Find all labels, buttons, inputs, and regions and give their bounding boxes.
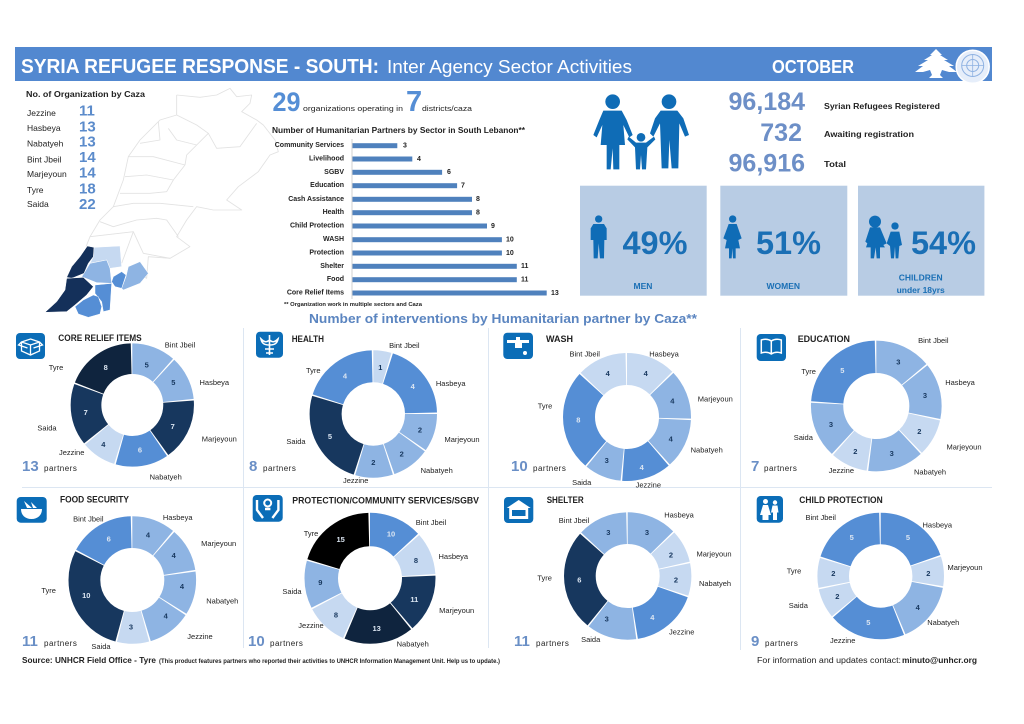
list rows: 13 xyxy=(79,118,96,136)
icon: box xyxy=(16,333,45,359)
partners count: 7 xyxy=(751,458,759,475)
slice labels: 2 xyxy=(926,569,930,578)
slice labels: Bint Jbeil xyxy=(389,341,420,350)
panel: women xyxy=(720,186,847,296)
partners count: partners xyxy=(765,639,798,648)
donut chart xyxy=(827,357,926,455)
slice labels: 5 xyxy=(171,378,175,387)
slice labels: Nabatyeh xyxy=(699,579,731,588)
list rows: 14 xyxy=(79,149,96,166)
refugee totals: 732 xyxy=(760,119,802,147)
slice labels: 8 xyxy=(334,610,338,620)
map of Lebanon with south highlighted xyxy=(45,88,278,317)
partners count: partners xyxy=(533,464,566,473)
icon: caduceus xyxy=(256,332,283,358)
refugee totals: Syrian Refugees Registered xyxy=(824,102,940,111)
partners count: 13 xyxy=(22,458,39,475)
partners count xyxy=(511,458,566,475)
slice labels: Marjeyoun xyxy=(202,434,237,444)
partners count: 10 xyxy=(511,458,528,475)
slice labels xyxy=(286,341,480,485)
slice labels: 5 xyxy=(145,360,149,370)
slice labels: 4 xyxy=(644,369,649,378)
bar values xyxy=(403,142,559,297)
bar category labels xyxy=(275,142,344,296)
panel: core relief items xyxy=(16,333,237,482)
list rows: Tyre xyxy=(27,185,44,195)
slice labels: 2 xyxy=(835,592,839,601)
list rows: 11 xyxy=(79,102,95,120)
icon: UN emblem xyxy=(956,50,989,83)
slice labels: Marjeyoun xyxy=(946,442,982,452)
slice labels xyxy=(538,350,733,490)
slice labels: Jezzine xyxy=(187,632,213,641)
footnote: ** Organization work in multiple sectors and Caza xyxy=(284,302,423,308)
slice labels: Saida xyxy=(581,635,601,644)
slice labels: 2 xyxy=(853,447,857,456)
panel: organizations by caza list xyxy=(26,89,145,213)
slice labels: Jezzine xyxy=(636,480,661,490)
slice labels: Nabatyeh xyxy=(914,468,946,476)
bar values: 9 xyxy=(491,223,495,230)
slice labels: 4 xyxy=(650,613,655,622)
bar values: 3 xyxy=(403,142,407,150)
slice labels: Nabatyeh xyxy=(691,446,723,454)
slice labels: Tyre xyxy=(304,529,318,538)
footer source: (This product features partners who reported their activities to UNHCR Information Management Unit. Help us to update.) xyxy=(159,659,500,665)
slice labels: 10 xyxy=(82,591,90,600)
bar category labels: Shelter xyxy=(320,263,344,270)
slice labels: Jezzine xyxy=(343,476,368,485)
partners count: partners xyxy=(263,464,296,473)
slice labels: 6 xyxy=(107,534,111,544)
icon: tap xyxy=(503,333,533,359)
list rows: 14 xyxy=(79,164,96,182)
section heading: Number of interventions by Humanitarian partner by Caza** xyxy=(309,311,698,326)
slice labels: Tyre xyxy=(306,366,321,375)
heading: CHILD PROTECTION xyxy=(799,495,883,505)
bar category labels: SGBV xyxy=(324,169,344,176)
panel: men xyxy=(580,186,707,296)
slice labels: 9 xyxy=(318,578,322,587)
slice labels: 3 xyxy=(605,614,609,624)
slice labels: Marjeyoun xyxy=(201,539,236,548)
icon: family xyxy=(593,94,689,169)
bar values: 4 xyxy=(417,156,421,163)
slice labels: 3 xyxy=(923,391,927,400)
slice labels: Jezzine xyxy=(829,466,854,475)
donut chart xyxy=(84,532,180,628)
caption detail: under 18yrs xyxy=(897,285,945,295)
list rows: Marjeyoun xyxy=(27,169,67,179)
bar values: 8 xyxy=(476,196,480,203)
slice labels: Hasbeya xyxy=(199,378,230,387)
slice labels: Hasbeya xyxy=(436,379,466,388)
icon: man xyxy=(591,215,607,258)
bar category labels: Community Services xyxy=(275,142,344,149)
slice labels: 15 xyxy=(337,535,345,544)
slice labels: 4 xyxy=(916,603,921,612)
slice labels: 7 xyxy=(171,422,175,431)
panel: shelter xyxy=(504,495,732,650)
slice labels: Jezzine xyxy=(830,636,855,645)
slice labels: Tyre xyxy=(537,574,552,582)
slice labels: Marjeyoun xyxy=(698,394,733,404)
slice labels: 4 xyxy=(343,372,348,380)
slice labels: 2 xyxy=(669,550,673,560)
bar values: 10 xyxy=(506,250,514,257)
slice labels: Bint Jbeil xyxy=(918,336,949,345)
heading: SHELTER xyxy=(547,495,584,505)
title: SYRIA REFUGEE RESPONSE - SOUTH: xyxy=(21,56,379,78)
slice labels: 2 xyxy=(418,426,422,434)
list rows: Saida xyxy=(27,199,49,209)
donut chart xyxy=(321,530,419,627)
partners count xyxy=(22,458,77,475)
slice labels: 4 xyxy=(669,434,674,444)
headline: organizations and districts: 7 xyxy=(406,86,422,118)
panel: child protection xyxy=(751,495,983,650)
slice labels: 3 xyxy=(605,456,609,465)
slice labels: Saida xyxy=(794,433,814,442)
heading: CORE RELIEF ITEMS xyxy=(58,333,142,343)
caption: WOMEN xyxy=(767,281,800,291)
bar category labels: Protection xyxy=(309,250,344,256)
list rows: Jezzine xyxy=(27,108,56,118)
slice labels: 3 xyxy=(129,622,133,632)
partners count: partners xyxy=(536,639,569,648)
donut chart xyxy=(580,528,676,624)
bar category labels: Livelihood xyxy=(309,156,344,162)
panel: health xyxy=(249,332,480,485)
slice labels: 3 xyxy=(896,358,900,366)
list rows: 13 xyxy=(79,134,96,150)
heading: FOOD SECURITY xyxy=(60,495,129,505)
slice labels: 8 xyxy=(576,416,580,424)
refugee totals: 96,184 xyxy=(729,88,805,116)
slice labels: Marjeyoun xyxy=(947,563,983,572)
slice labels: 3 xyxy=(645,528,649,537)
slice labels: Bint Jbeil xyxy=(569,350,600,358)
header banner xyxy=(15,47,992,83)
slice labels xyxy=(794,336,982,476)
refugee totals xyxy=(729,88,940,178)
icon: children xyxy=(757,496,783,523)
panel: children xyxy=(858,186,984,296)
slice labels: Jezzine xyxy=(669,628,694,636)
donut chart xyxy=(833,528,928,624)
partners count xyxy=(248,633,303,650)
slice labels: 4 xyxy=(164,612,169,620)
slice labels: 5 xyxy=(328,432,332,441)
list rows: Nabatyeh xyxy=(27,139,64,149)
month: OCTOBER xyxy=(772,56,854,77)
headline: organizations and districts: 29 xyxy=(272,87,300,117)
list rows: 18 xyxy=(79,180,96,198)
slice labels: Bint Jbeil xyxy=(805,513,836,522)
slice labels: Nabatyeh xyxy=(206,596,238,606)
footer source: Source: UNHCR Field Office - Tyre xyxy=(22,655,156,665)
slice labels: 4 xyxy=(101,440,106,449)
partners count: partners xyxy=(44,464,77,473)
partners count: partners xyxy=(270,639,303,648)
chart title: Number of Humanitarian Partners by Sector in South Lebanon** xyxy=(272,126,526,135)
slice labels: Marjeyoun xyxy=(439,606,474,615)
slice labels: 3 xyxy=(890,449,894,458)
slice labels: 4 xyxy=(411,382,416,391)
icon: bowl xyxy=(17,497,47,523)
caption: MEN xyxy=(634,281,652,291)
slice labels: Nabatyeh xyxy=(150,472,182,482)
list rows xyxy=(27,102,96,213)
list rows: 22 xyxy=(79,196,96,213)
slice labels: Bint Jbeil xyxy=(165,340,196,350)
percentage: 51% xyxy=(756,225,821,261)
slice labels: Hasbeya xyxy=(649,350,680,358)
heading: WASH xyxy=(546,334,573,344)
slice labels: Jezzine xyxy=(298,621,324,630)
slice labels: Hasbeya xyxy=(163,513,193,522)
slice labels: Jezzine xyxy=(59,448,84,457)
heading: HEALTH xyxy=(292,334,324,344)
slice labels: Saida xyxy=(37,424,57,432)
slice labels: 6 xyxy=(138,446,142,454)
slice labels: 8 xyxy=(414,556,418,565)
slice labels: Nabatyeh xyxy=(421,466,453,475)
partners count: partners xyxy=(44,639,77,648)
slice labels: Hasbeya xyxy=(945,378,976,387)
headline: organizations and districts: districts/caza xyxy=(422,104,473,113)
partners count xyxy=(514,633,569,650)
bar values: 11 xyxy=(521,276,529,284)
icon: protecting hands xyxy=(253,495,283,522)
slice labels: 3 xyxy=(606,528,610,537)
partners count xyxy=(249,458,296,475)
bar values: 13 xyxy=(551,290,559,297)
partners count xyxy=(751,458,797,475)
slice labels: Tyre xyxy=(49,363,63,372)
slice labels: Bint Jbeil xyxy=(416,518,447,527)
slice labels: Tyre xyxy=(801,367,816,376)
slice labels: 2 xyxy=(400,450,404,458)
partners count: 11 xyxy=(22,633,38,650)
slice labels: Saida xyxy=(789,601,809,610)
panel: protection / community services / sgbv xyxy=(248,495,479,650)
donut chart xyxy=(326,366,421,462)
slice labels: Saida xyxy=(91,642,111,651)
subtitle: Inter Agency Sector Activities xyxy=(387,56,632,77)
footer contact: For information and updates contact: xyxy=(757,656,901,665)
bars xyxy=(352,143,547,296)
slice labels: Hasbeya xyxy=(922,520,953,530)
panel: education xyxy=(751,334,982,476)
panel: wash xyxy=(503,333,733,490)
slice labels: Saida xyxy=(286,437,306,446)
slice labels: 10 xyxy=(387,530,395,538)
slice labels: Bint Jbeil xyxy=(73,514,104,524)
slice labels: Tyre xyxy=(538,402,552,410)
slice labels: 11 xyxy=(410,595,418,604)
slice labels xyxy=(37,340,237,482)
slice labels: 13 xyxy=(373,624,381,633)
bar category labels: Education xyxy=(310,182,344,189)
partners count xyxy=(22,633,77,650)
bar category labels: Child Protection xyxy=(290,222,344,230)
slice labels: 6 xyxy=(577,576,581,584)
heading: EDUCATION xyxy=(798,334,850,344)
footer contact: minuto@unhcr.org xyxy=(902,655,977,665)
percentage: 54% xyxy=(911,225,976,261)
heading: PROTECTION/COMMUNITY SERVICES/SGBV xyxy=(292,496,479,506)
slice labels: Saida xyxy=(572,478,592,487)
donut chart xyxy=(86,359,179,451)
percentage: 49% xyxy=(622,225,688,261)
bar category labels: Cash Assistance xyxy=(288,196,344,203)
refugee totals: Total xyxy=(824,160,846,169)
slice labels: 1 xyxy=(378,363,382,372)
slice labels: 8 xyxy=(104,363,108,372)
slice labels xyxy=(41,513,238,651)
slice labels: 2 xyxy=(831,569,835,578)
slice labels: 4 xyxy=(172,551,177,560)
slice labels: Saida xyxy=(282,587,302,596)
slice labels: 4 xyxy=(606,369,611,378)
list rows: Hasbeya xyxy=(27,123,61,133)
slice labels: 4 xyxy=(640,463,645,472)
bar values: 10 xyxy=(506,236,514,244)
bar category labels: Core Relief Items xyxy=(287,290,344,296)
slice labels: Nabatyeh xyxy=(397,640,429,648)
bar category labels: Health xyxy=(323,209,344,216)
slice labels: Marjeyoun xyxy=(444,435,480,444)
slice labels: 4 xyxy=(670,396,675,406)
partners count: 11 xyxy=(514,633,530,650)
slice labels: Hasbeya xyxy=(664,510,695,520)
headline: organizations and districts: organizations operating in xyxy=(303,104,403,113)
slice labels: Bint Jbeil xyxy=(559,516,590,525)
list heading: No. of Organization by Caza xyxy=(26,89,145,99)
icon: cedar tree xyxy=(915,49,957,78)
donut chart xyxy=(579,369,675,465)
slice labels: 2 xyxy=(674,576,678,584)
bar category labels: Food xyxy=(327,276,344,283)
slice labels: Nabatyeh xyxy=(927,618,959,627)
bar values: 8 xyxy=(476,210,480,216)
partners count: 8 xyxy=(249,458,257,475)
bar chart: partners by sector xyxy=(272,126,559,308)
slice labels: 4 xyxy=(180,582,185,591)
panel: food security xyxy=(17,495,238,651)
slice labels: 2 xyxy=(371,458,375,467)
footer contact xyxy=(757,655,977,665)
bar values: 6 xyxy=(447,169,451,176)
slice labels: Tyre xyxy=(787,566,801,576)
slice labels: 3 xyxy=(829,420,833,429)
slice labels xyxy=(537,510,732,644)
bar category labels: WASH xyxy=(323,236,344,243)
icon: book xyxy=(757,334,786,361)
partners count: 10 xyxy=(248,633,265,650)
slice labels: 4 xyxy=(146,530,151,540)
slice labels: 5 xyxy=(866,618,870,627)
slice labels xyxy=(787,513,983,645)
icon: house xyxy=(504,497,533,523)
caption: CHILDREN xyxy=(899,273,943,283)
slice labels: 5 xyxy=(840,366,844,375)
partners count: partners xyxy=(764,464,797,473)
bar values: 7 xyxy=(461,182,465,190)
headline: organizations and districts xyxy=(272,86,473,118)
footer source xyxy=(22,655,500,665)
slice labels: Hasbeya xyxy=(438,552,469,561)
slice labels: 5 xyxy=(906,533,910,542)
slice labels: Tyre xyxy=(41,586,56,595)
list rows: Bint Jbeil xyxy=(27,154,62,164)
slice labels: 7 xyxy=(84,408,88,417)
refugee totals: Awaiting registration xyxy=(824,130,914,139)
icon: woman xyxy=(723,215,742,258)
icon: children xyxy=(865,216,902,258)
slice labels: Marjeyoun xyxy=(696,550,732,558)
slice labels xyxy=(282,518,474,648)
partners count: 9 xyxy=(751,633,759,650)
slice labels: 5 xyxy=(850,533,854,542)
partners count xyxy=(751,633,798,650)
bar values: 11 xyxy=(521,263,529,270)
refugee totals: 96,916 xyxy=(729,150,805,178)
slice labels: 2 xyxy=(917,427,921,436)
